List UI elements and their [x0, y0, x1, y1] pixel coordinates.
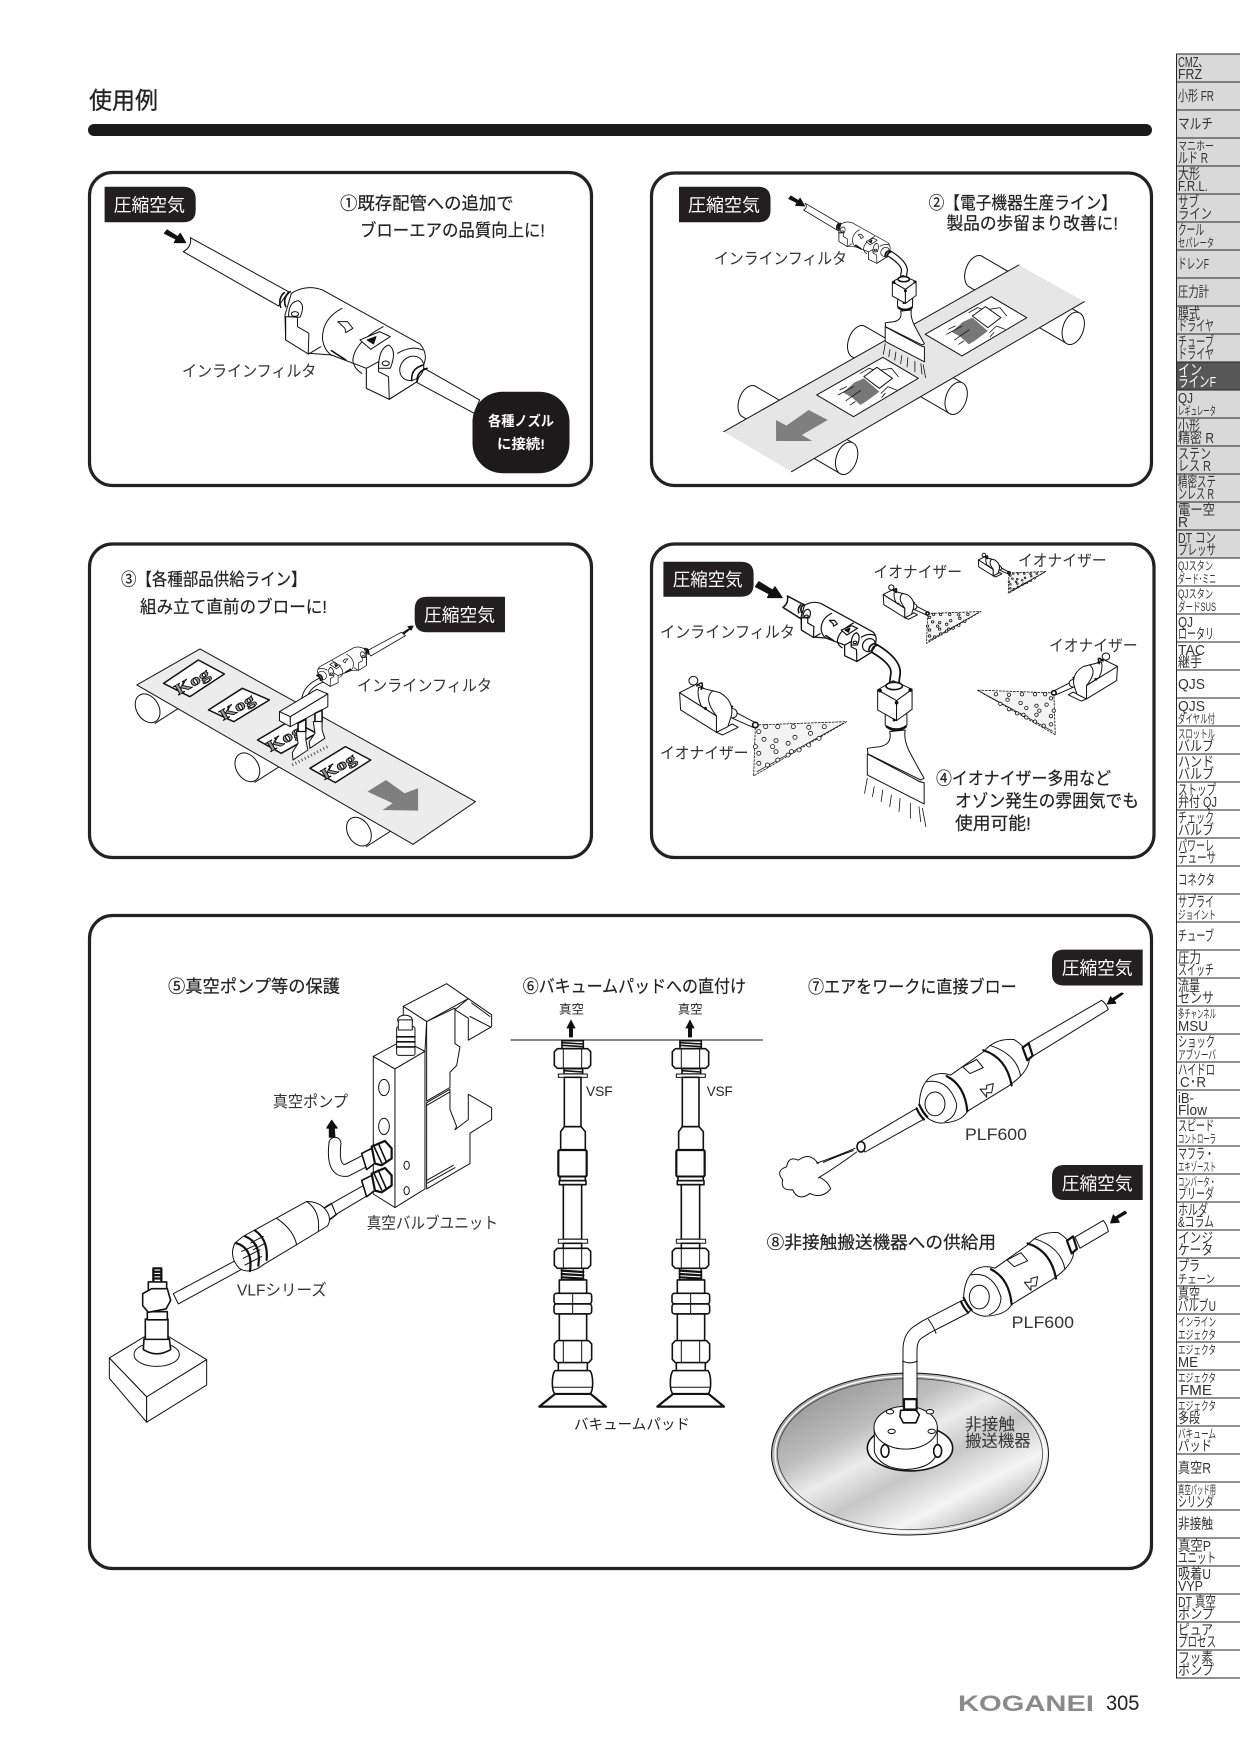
labels: vacuum unit parts: 真空ポンプ [273, 1093, 348, 1111]
tab: Flow [1178, 1103, 1207, 1119]
tab: ホルダ [1178, 1202, 1208, 1219]
tab: パッド [1178, 1438, 1212, 1455]
tab [1176, 1482, 1240, 1511]
label: PLF600: PLF600 [1012, 1314, 1074, 1332]
tab: エジェクタ [1178, 1343, 1216, 1357]
tab: コネクタ [1178, 872, 1215, 889]
tab: F.R.L. [1178, 179, 1208, 195]
tab: QJS [1178, 699, 1205, 715]
tab: レス R [1178, 459, 1211, 475]
labels: vacuum pad parts: 真空 [559, 1002, 584, 1016]
tag: compressed air [679, 187, 770, 222]
tab [1176, 1202, 1240, 1231]
tab [1176, 1594, 1240, 1623]
tab: チューブ [1178, 927, 1214, 945]
tab: MSU [1178, 1019, 1208, 1035]
tab: 電ー空 [1178, 502, 1215, 519]
tab: CMZ、 [1178, 55, 1208, 71]
illustration: conveyor with labelled parts [130, 626, 476, 850]
tab: 流量 [1178, 978, 1200, 995]
tab: サプライ [1178, 894, 1214, 911]
label: inline filter: インラインフィルタ [182, 362, 316, 380]
tab: ハンド [1178, 755, 1214, 771]
sidebar: category tabs [1176, 54, 1240, 1679]
tab: インジ [1178, 1231, 1213, 1247]
panel 1: existing piping [90, 172, 592, 486]
tab: パワーレ [1178, 838, 1214, 855]
labels: filter and ionizers: イオナイザー [1049, 637, 1138, 655]
illustration: conveyor with labelled parts: Kog [318, 750, 360, 783]
tab [1176, 978, 1240, 1007]
caption 1: ブローエアの品質向上に! [360, 220, 545, 240]
panel 2: electronics production line [652, 173, 1152, 486]
tab [1176, 558, 1240, 586]
tab [1176, 1258, 1240, 1286]
tab: ポンプ [1178, 1662, 1214, 1679]
tab [1176, 1006, 1240, 1035]
tab [1176, 390, 1240, 418]
tab [1176, 894, 1240, 922]
tab: 多段 [1178, 1409, 1200, 1427]
labels: vacuum unit parts [237, 1093, 498, 1300]
tab: ハイドロ [1178, 1063, 1215, 1079]
tag: compressed air: 圧縮空気 [688, 196, 760, 216]
tab [1176, 586, 1240, 614]
tab: ストップ [1178, 782, 1216, 799]
caption 1: ①既存配管への追加で [340, 194, 514, 214]
labels: filter and ionizers: イオナイザー [874, 564, 962, 582]
tab: バキューム [1178, 1427, 1216, 1441]
tab: マニホー [1178, 139, 1214, 153]
caption 2: ②【電子機器生産ライン】 [929, 193, 1117, 213]
tag: compressed air: 圧縮空気 [673, 570, 743, 590]
tab [1176, 1426, 1240, 1455]
tab: VYP [1178, 1579, 1203, 1595]
tab: エジェクタ [1178, 1399, 1216, 1413]
tab [1176, 1146, 1240, 1174]
tab [1176, 1370, 1240, 1399]
tab: スイッチ [1178, 963, 1214, 979]
panel 5-8: vacuum and direct blow examples [90, 916, 1152, 1568]
tab [1176, 82, 1240, 110]
illustration: conveyor with labelled parts: Kog [217, 691, 258, 724]
tab: ンレス R [1178, 487, 1214, 503]
caption 2: 製品の歩留まり改善に! [946, 214, 1118, 234]
tab [1176, 698, 1240, 726]
tab [1176, 502, 1240, 531]
tab: プロセス [1178, 1634, 1216, 1651]
caption 4 [936, 768, 1139, 834]
tab: 圧力 [1178, 950, 1201, 967]
tab: バルブU [1178, 1297, 1216, 1315]
tab: ME [1178, 1355, 1198, 1371]
tab [1176, 754, 1240, 783]
tag: compressed air [105, 187, 196, 222]
label: PLF600: PLF600 [965, 1126, 1027, 1144]
label: non-contact conveyor: 非接触 [965, 1415, 1015, 1434]
tab [1176, 614, 1240, 643]
tab: アブソーバ [1178, 1047, 1216, 1062]
tab: サブ [1178, 193, 1199, 211]
tab [1176, 1286, 1240, 1315]
tab: ドライヤ [1178, 319, 1214, 335]
tab: バルブ [1178, 765, 1214, 783]
tab: フッ素 [1178, 1650, 1213, 1667]
tab [1176, 530, 1240, 559]
callout: connect to nozzles [472, 392, 570, 473]
labels: vacuum unit parts: VLFシリーズ [237, 1282, 327, 1300]
tab: FME [1180, 1383, 1212, 1399]
tab: シリンダ [1178, 1494, 1214, 1511]
tab: セパレータ [1178, 236, 1214, 250]
tab: ドライヤ [1178, 347, 1214, 363]
tab [1176, 1622, 1240, 1651]
tab [1176, 1118, 1240, 1146]
tab: バルブ [1178, 737, 1214, 755]
tab: 非接触 [1178, 1516, 1213, 1533]
tag: compressed air [415, 597, 505, 632]
tab: デューサ [1178, 849, 1216, 867]
illustration: vacuum valve unit with VLF filter and pad [109, 984, 492, 1422]
caption 5: ⑤真空ポンプ等の保護 [168, 976, 340, 996]
tab: 圧力計 [1178, 284, 1209, 301]
tab [1176, 726, 1240, 755]
tab: エジェクタ [1178, 1371, 1216, 1385]
tab: iB- [1178, 1091, 1194, 1107]
illustration: inline filter on pipe [164, 230, 480, 413]
tab: DT コン [1178, 531, 1216, 547]
tab: スピード [1178, 1118, 1214, 1135]
tab [1176, 1090, 1240, 1119]
tab: 真空R [1178, 1460, 1211, 1477]
label: non-contact conveyor: 搬送機器 [965, 1432, 1031, 1450]
illustration: ionizer top right [978, 553, 1046, 593]
tab: 弁付 QJ [1178, 794, 1217, 811]
tab: QJS [1178, 677, 1205, 693]
tab: 膜式 [1178, 306, 1200, 323]
tab: 精密ステ [1178, 474, 1216, 491]
labels: filter and ionizers: イオナイザー [660, 744, 748, 762]
tab [1176, 642, 1240, 671]
tab: ピュア [1178, 1622, 1213, 1639]
tab [1176, 1538, 1240, 1567]
illustration: two vacuum pad assemblies [511, 1019, 763, 1407]
tab: ショック [1178, 1034, 1215, 1051]
tab: 大形 [1178, 166, 1200, 183]
tag: compressed air: 圧縮空気 [1062, 1174, 1133, 1194]
tab: ドレンF [1178, 257, 1209, 273]
tag: compressed air [663, 562, 754, 597]
caption 4: ④イオナイザー多用など [936, 768, 1111, 788]
labels: vacuum pad parts: VSF [586, 1084, 613, 1099]
tab: ステン [1178, 447, 1211, 463]
tab [1176, 166, 1240, 195]
tab: 小形 [1178, 418, 1200, 435]
tab [1176, 950, 1240, 979]
tab [1176, 1034, 1240, 1062]
illustration: non-contact conveyor disc with PLF600 [772, 1211, 1127, 1535]
tab: ライン [1178, 207, 1212, 223]
tab [1176, 866, 1240, 894]
tag: compressed air: 圧縮空気 [114, 196, 185, 216]
labels: vacuum pad parts: 真空 [678, 1002, 703, 1016]
caption 3: 組み立て直前のブローに! [140, 597, 327, 617]
tab [1176, 922, 1240, 950]
tab: ダードSUS [1178, 599, 1216, 614]
label: inline filter: インラインフィルタ [357, 677, 492, 695]
labels: vacuum pad parts: バキュームパッド [574, 1416, 690, 1434]
caption 4: オゾン発生の雰囲気でも [955, 791, 1139, 811]
tab [1176, 333, 1240, 363]
tab: DT 真空 [1178, 1594, 1216, 1611]
tab: プレッサ [1178, 542, 1216, 559]
tab [1176, 670, 1240, 698]
tab: 精密 R [1178, 430, 1214, 447]
footer: brand logo: KOGANEI [958, 1691, 1094, 1716]
illustration: ionizer lower left [680, 676, 847, 776]
tab [1176, 54, 1240, 83]
tab: ケータ [1178, 1242, 1213, 1259]
labels: vacuum pad parts: VSF [707, 1084, 733, 1099]
tag: compressed air [1052, 1165, 1143, 1200]
caption 8: ⑧非接触搬送機器への供給用 [767, 1232, 996, 1252]
tab: ユニット [1178, 1551, 1216, 1567]
tab: インライン [1178, 1315, 1216, 1329]
tab: 真空P [1178, 1538, 1211, 1555]
tab [1176, 222, 1240, 250]
tab: チューブ [1178, 333, 1214, 351]
caption 3 [121, 570, 327, 617]
illustration: filter and blow nozzle [755, 582, 926, 827]
tab [1176, 1314, 1240, 1342]
tab: チェーン [1178, 1272, 1215, 1286]
tab [1176, 1342, 1240, 1371]
tab: current section: イン [1178, 363, 1202, 379]
tab: ロータリ [1178, 626, 1214, 643]
illustration: PLF600 direct blow [780, 993, 1123, 1197]
tab: QJスタン [1178, 587, 1213, 601]
caption 6: ⑥バキュームパッドへの直付け [523, 976, 746, 996]
tab [1176, 138, 1240, 167]
panel 4: ionizer environment [652, 544, 1154, 858]
tab [1176, 193, 1240, 223]
tab: 継手 [1178, 654, 1202, 671]
tab: ルド R [1178, 151, 1208, 167]
caption 1 [340, 194, 545, 240]
tab [1176, 810, 1240, 839]
tab [1176, 418, 1240, 447]
tab [1176, 250, 1240, 278]
tag: compressed air [1052, 950, 1143, 986]
title rule bar [88, 124, 1152, 136]
illustration: conveyor with labelled parts: Kog [264, 722, 306, 755]
tab [1176, 1454, 1240, 1482]
tab: マフラ・ [1178, 1147, 1214, 1163]
tab [1176, 446, 1240, 475]
illustration: conveyor with labelled parts: Kog [172, 665, 213, 699]
tab [1176, 1510, 1240, 1538]
labels: filter and ionizers: イオナイザー [1018, 552, 1107, 570]
tab: ブリーダ [1178, 1185, 1214, 1203]
page title: 使用例 [89, 88, 158, 114]
tab: 吸着U [1178, 1566, 1211, 1583]
tab: current section: ラインF [1178, 375, 1216, 391]
tab [1176, 782, 1240, 811]
tab: マルチ [1178, 117, 1213, 133]
tab [1176, 306, 1240, 335]
tab: current section [1176, 362, 1240, 391]
illustration: ionizer top centre [883, 585, 981, 643]
tab: ダイヤル付 [1178, 711, 1215, 726]
tab: センサ [1178, 991, 1214, 1007]
illustration: conveyor with circuit boards [724, 196, 1088, 477]
panel 3: parts supply line [90, 544, 592, 858]
tab [1176, 278, 1240, 306]
tab [1176, 110, 1240, 138]
labels: filter and ionizers [660, 552, 1138, 762]
label: non-contact conveyor [965, 1415, 1031, 1450]
tab: 小形 FR [1178, 88, 1214, 105]
caption 2 [929, 193, 1118, 234]
label: inline filter: インラインフィルタ [714, 250, 847, 268]
tab [1176, 1566, 1240, 1595]
tab: R [1178, 515, 1188, 531]
labels: filter and ionizers: インラインフィルタ [660, 624, 795, 642]
labels: vacuum pad parts [559, 1002, 733, 1434]
footer: page number: 305 [1106, 1692, 1139, 1715]
tab: 真空 [1178, 1286, 1200, 1303]
callout: connect to nozzles: 各種ノズル [488, 413, 554, 429]
callout: connect to nozzles: に接続! [497, 436, 545, 452]
tab [1176, 474, 1240, 503]
tab [1176, 1062, 1240, 1091]
tab: チェック [1178, 810, 1214, 827]
tab: &コラム [1178, 1215, 1214, 1231]
tab: C･R [1180, 1075, 1206, 1091]
tab: バルブ [1178, 821, 1214, 839]
tab: クール [1178, 222, 1204, 239]
tab: QJ [1178, 615, 1193, 631]
tab [1176, 1174, 1240, 1203]
illustration: ionizer right [977, 653, 1117, 735]
tab [1176, 1398, 1240, 1427]
tab: QJスタン [1178, 559, 1213, 573]
tab [1176, 838, 1240, 867]
tab: ジョイント [1178, 908, 1216, 922]
tab [1176, 1230, 1240, 1259]
tag: compressed air: 圧縮空気 [1062, 958, 1133, 978]
caption 7: ⑦エアをワークに直接ブロー [808, 977, 1017, 997]
tab: プラ [1178, 1258, 1200, 1275]
tab: QJ [1178, 391, 1193, 407]
tab [1176, 1650, 1240, 1679]
caption 4: 使用可能! [955, 814, 1031, 834]
caption 3: ③【各種部品供給ライン】 [121, 570, 306, 590]
tab: FRZ [1178, 67, 1202, 83]
tab: スロットル [1178, 727, 1215, 741]
tab: TAC [1178, 643, 1205, 659]
tab: エジェクタ [1178, 1328, 1216, 1342]
labels: vacuum unit parts: 真空バルブユニット [367, 1214, 498, 1232]
tab: ポンプ [1178, 1606, 1214, 1623]
tag: compressed air: 圧縮空気 [424, 606, 495, 626]
